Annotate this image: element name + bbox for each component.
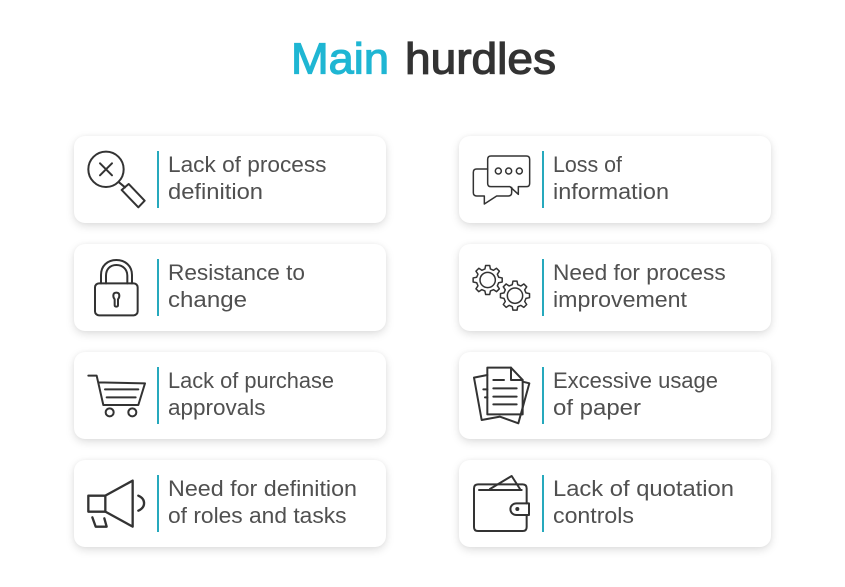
title: hurdles — [405, 34, 556, 83]
panel: loss of information: information — [553, 179, 669, 204]
panel: need for definition of roles and tasks — [74, 460, 386, 547]
label text: Lack of quotation — [553, 476, 734, 501]
label text: Need for process — [553, 260, 726, 285]
icon: megaphone — [88, 481, 144, 527]
panel: excessive usage of paper — [459, 352, 771, 439]
panel: lack of process definition — [74, 136, 386, 223]
icon: wallet — [474, 476, 529, 531]
icon: gears — [473, 265, 530, 310]
title — [291, 34, 556, 83]
label text: Lack of purchase — [168, 368, 334, 393]
icon: chat bubbles — [473, 156, 530, 204]
panel: excessive usage of paper: of paper — [553, 395, 642, 420]
label text: Excessive usage — [553, 368, 718, 393]
panel: resistance to change — [74, 244, 386, 331]
panel: loss of information — [459, 136, 771, 223]
label text: Lack of process — [168, 152, 326, 177]
icon: magnifying glass — [88, 152, 145, 207]
icon: padlock — [95, 260, 138, 315]
title: Main — [291, 34, 389, 83]
panel: need for process improvement: improvement — [553, 287, 688, 312]
label text: Need for definition — [168, 476, 357, 501]
label text: Resistance to — [168, 260, 305, 285]
panel: lack of process definition: definition — [168, 179, 263, 204]
panel: resistance to change: change — [168, 287, 247, 312]
panel: lack of quotation controls — [459, 460, 771, 547]
panel: lack of purchase approvals — [74, 352, 386, 439]
icon: shopping cart — [88, 376, 145, 416]
panel: need for process improvement — [459, 244, 771, 331]
panel: lack of purchase approvals: approvals — [168, 395, 266, 420]
label text: Loss of — [553, 152, 623, 177]
icon: paper stack — [474, 368, 529, 423]
panel: need for definition of roles and tasks: of roles and tasks — [168, 503, 346, 528]
panel: lack of quotation controls: controls — [553, 503, 634, 528]
